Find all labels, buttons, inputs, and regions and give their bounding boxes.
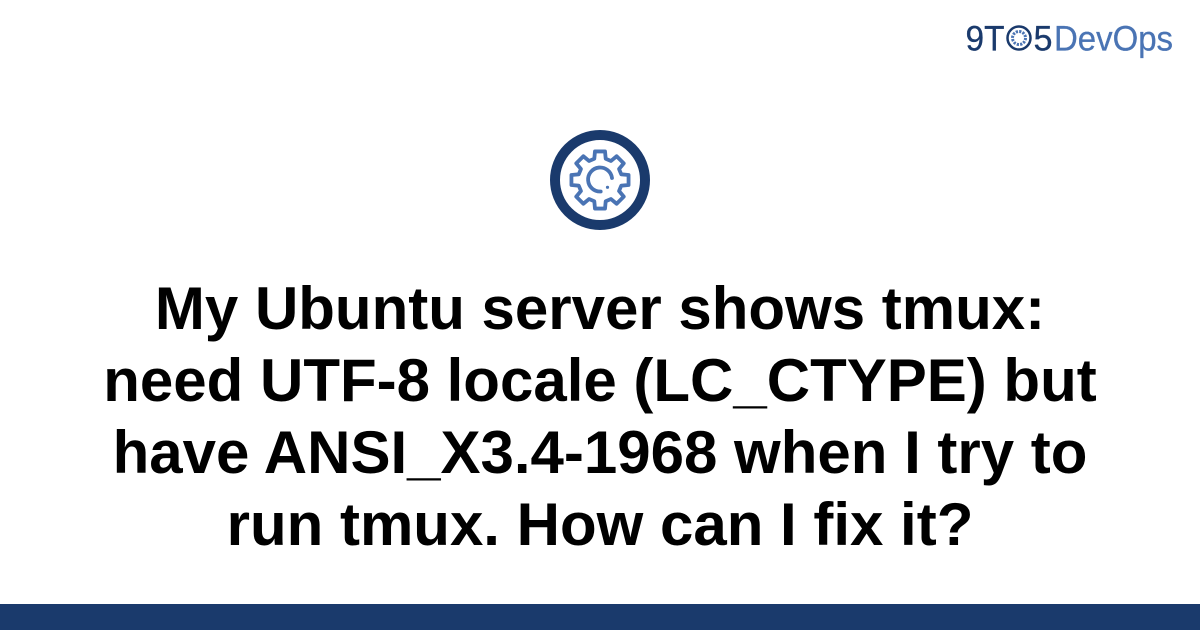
logo: 9TO5DevOps <box>966 20 1173 58</box>
logo: 9TO5DevOps: 5 <box>1034 20 1052 58</box>
title <box>103 275 1097 558</box>
icon: gear in circle <box>550 130 650 230</box>
title: need UTF-8 locale (LC_CTYPE) but <box>103 347 1097 414</box>
logo: 9TO5DevOps: 9T <box>966 20 1004 58</box>
logo: 9TO5DevOps: DevOps <box>1054 20 1173 58</box>
footer bar <box>0 604 1200 630</box>
title: run tmux. How can I fix it? <box>227 491 973 558</box>
title: My Ubuntu server shows tmux: <box>155 275 1045 342</box>
title: have ANSI_X3.4-1968 when I try to <box>113 419 1087 486</box>
